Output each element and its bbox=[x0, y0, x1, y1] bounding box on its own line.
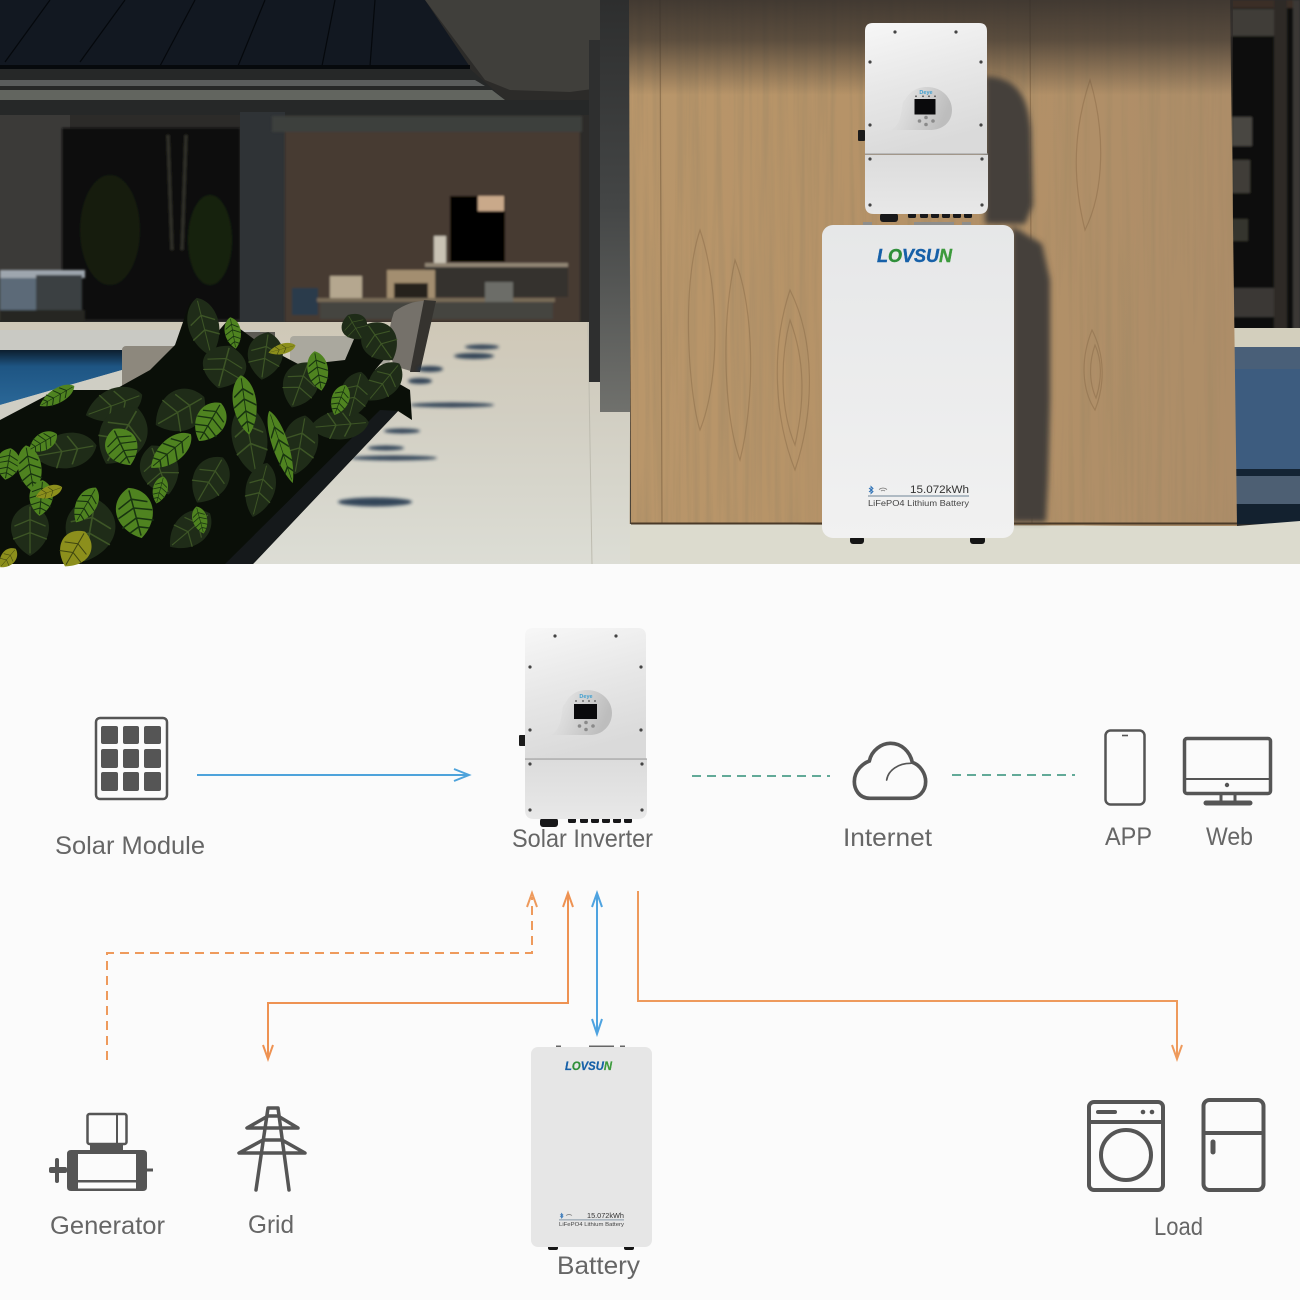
diagram battery icons bbox=[560, 1214, 572, 1218]
blue sofa bbox=[1232, 328, 1300, 524]
stone ottoman bbox=[122, 346, 177, 394]
roof solar panels bbox=[0, 0, 470, 69]
inverter screen bbox=[914, 99, 936, 114]
diagram inverter display bump bbox=[550, 690, 612, 735]
battery type: LiFePO4 Lithium Battery bbox=[868, 499, 969, 508]
battery feet bbox=[850, 536, 985, 544]
inverter leds and buttons bbox=[915, 95, 936, 126]
diagram battery rule bbox=[559, 1218, 624, 1221]
diagram inverter divider bbox=[525, 758, 647, 760]
diagram battery brackets bbox=[556, 1046, 625, 1047]
link: internet to app and web bbox=[952, 774, 1075, 776]
label: web: Web bbox=[1206, 823, 1253, 851]
diagram inverter screws bbox=[528, 634, 644, 812]
icon: phone bbox=[1106, 730, 1144, 804]
battery logo: LOVSUN bbox=[877, 246, 953, 266]
right background window bbox=[1230, 0, 1300, 330]
equipment shadow on wall bbox=[985, 76, 1050, 522]
floor at wall base bbox=[630, 521, 1300, 564]
diagram inverter screen bbox=[574, 704, 597, 719]
battery body bbox=[822, 225, 1014, 538]
pool coping bbox=[0, 330, 260, 350]
label: load: Load bbox=[1154, 1213, 1203, 1241]
dark garden window bbox=[62, 128, 240, 320]
inverter upper body bbox=[865, 23, 987, 154]
diagram inverter bbox=[519, 628, 647, 827]
label: battery: Battery bbox=[557, 1252, 641, 1280]
link: inverter to internet bbox=[692, 775, 830, 777]
inverter display bump bbox=[890, 87, 952, 130]
pool water bbox=[0, 350, 125, 405]
label: generator: Generator bbox=[50, 1212, 165, 1240]
label: internet: Internet bbox=[843, 824, 932, 852]
icon: generator bbox=[49, 1114, 153, 1191]
battery on wall bbox=[822, 222, 1014, 544]
diagram battery logo: LOVSUN bbox=[565, 1061, 613, 1073]
interior room bbox=[272, 116, 582, 322]
arrow: generator to inverter bbox=[107, 893, 537, 1060]
left wall bbox=[0, 115, 70, 320]
label: solar inverter: Solar Inverter bbox=[512, 825, 653, 853]
roof beam bbox=[0, 69, 590, 115]
diagram inverter glands bbox=[540, 818, 632, 827]
wood wall bbox=[629, 0, 1237, 526]
arrow: inverter and battery bbox=[592, 893, 602, 1034]
inverter brand: Deye bbox=[919, 90, 933, 96]
diagram inverter switch bbox=[519, 735, 526, 746]
pool deck bbox=[0, 370, 140, 425]
battery top brackets bbox=[863, 222, 971, 225]
floor seam bbox=[588, 322, 592, 564]
diagram battery body bbox=[531, 1047, 652, 1247]
label: grid: Grid bbox=[248, 1211, 294, 1239]
diagram battery feet bbox=[548, 1244, 634, 1250]
lounge chairs bbox=[235, 300, 436, 372]
diagram inverter leds and buttons bbox=[575, 700, 596, 731]
icon: refrigerator bbox=[1204, 1100, 1264, 1190]
diagram battery type: LiFePO4 Lithium Battery bbox=[559, 1222, 624, 1228]
label: solar module: Solar Module bbox=[55, 832, 205, 860]
diagram inverter brand: Deye bbox=[579, 694, 593, 700]
icon: washing machine bbox=[1089, 1102, 1163, 1190]
inverter divider bbox=[865, 154, 988, 155]
panel: house photo scene bbox=[0, 0, 1300, 574]
soffit overhang bbox=[425, 0, 600, 92]
diagram battery capacity: 15.072kWh bbox=[587, 1211, 624, 1220]
battery icons bbox=[869, 486, 887, 494]
inverter side switch bbox=[858, 130, 865, 141]
diagram inverter upper body bbox=[525, 628, 646, 759]
diagram inverter lower body bbox=[525, 760, 647, 819]
inverter lower body bbox=[865, 155, 988, 214]
pillar bbox=[240, 112, 285, 324]
icon: solar module bbox=[96, 718, 167, 799]
diagram battery bbox=[531, 1046, 652, 1250]
column bbox=[589, 0, 630, 412]
ground shadows bbox=[338, 344, 499, 506]
outdoor sofa bbox=[0, 270, 85, 322]
battery capacity: 15.072kWh bbox=[910, 484, 969, 496]
icon: monitor bbox=[1184, 738, 1270, 803]
inverter screws bbox=[868, 30, 984, 207]
inverter glands bbox=[880, 213, 972, 222]
foreground plants bbox=[0, 294, 412, 574]
terrace floor bbox=[0, 322, 630, 564]
arrow: solar module to inverter bbox=[197, 769, 469, 781]
label: app: APP bbox=[1105, 823, 1152, 851]
icon: cloud bbox=[854, 743, 926, 798]
icon: grid tower bbox=[239, 1108, 305, 1190]
arrow: inverter and grid bbox=[263, 893, 573, 1059]
battery rule bbox=[868, 496, 969, 497]
arrow: inverter to load bbox=[638, 891, 1182, 1059]
inverter on wall bbox=[858, 23, 988, 222]
